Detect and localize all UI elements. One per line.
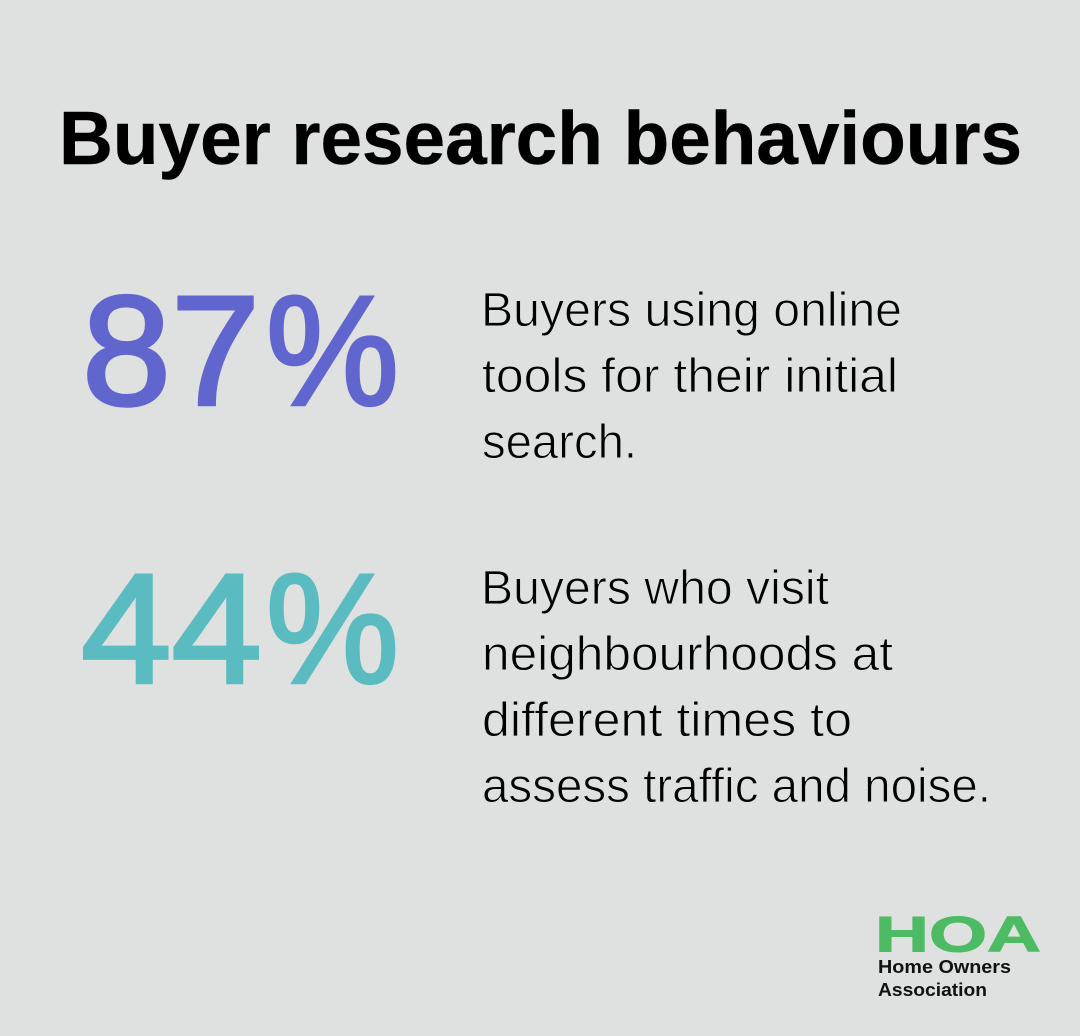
title: Buyer research behaviours [59, 96, 1022, 180]
logo: Home Owners Association [875, 906, 1041, 1000]
logo mark: HOA: HOA [875, 906, 1041, 962]
stat description: online tools: tools for their initial [482, 350, 898, 403]
stat description: neighbourhood visits: Buyers who visit [481, 562, 829, 615]
logo wordmark [878, 956, 1011, 1000]
stat description: online tools: search. [482, 416, 637, 469]
stat description: neighbourhood visits: different times to [482, 694, 852, 747]
stat description: online tools: Buyers using online [481, 284, 902, 337]
stat description: neighbourhood visits [481, 562, 991, 813]
stat description: neighbourhood visits: assess traffic and noise. [482, 760, 991, 813]
panel: stat 87% [82, 264, 902, 469]
stat number: 87%: % [266, 264, 399, 438]
stat description: neighbourhood visits: neighbourhoods at [482, 628, 893, 681]
logo wordmark: Association [878, 979, 987, 1000]
stat number: 44%: % [266, 542, 399, 716]
stat description: online tools [481, 284, 902, 469]
logo wordmark: Home Owners [878, 956, 1011, 977]
stat number: 87%: 87 [82, 264, 260, 438]
panel: stat 44% [81, 542, 991, 813]
stat number: 44%: 44 [81, 542, 262, 716]
